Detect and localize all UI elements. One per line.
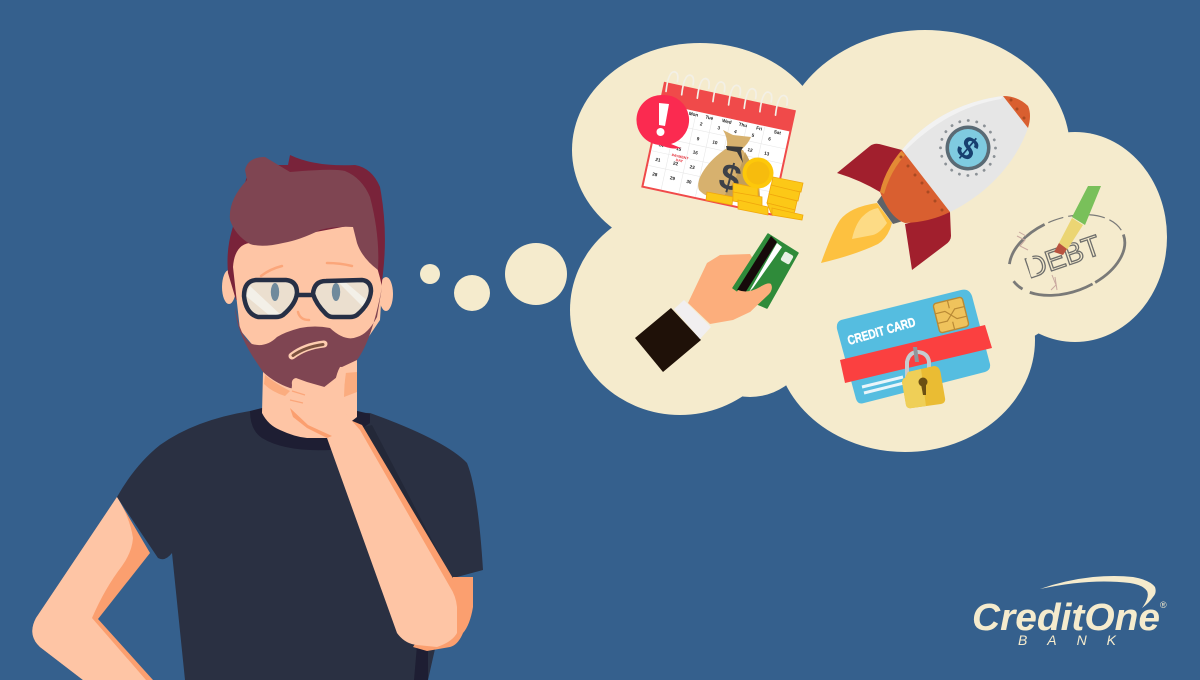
pencil eraser [1054,186,1101,255]
calendar sheet: PAYMENT [671,153,690,161]
beard [235,287,382,390]
flame [821,203,892,263]
logo: Credit One Bank [972,576,1167,648]
stamp word: DEBT [1021,230,1105,285]
calendar sheet: 28 [652,171,658,178]
calendar sheet: DAY [675,158,684,164]
card label: CREDIT CARD [846,314,917,348]
calendar sheet: 10 [712,139,718,145]
icon: hand holding card [635,234,798,372]
calendar sheet: 12 [747,147,754,153]
mouth [292,344,324,356]
green card [733,234,798,308]
calendar sheet: Wed [722,118,732,125]
calendar sheet: Fri [756,125,763,132]
calendar sheet: 6 [768,136,772,142]
calendar sheet: Tue [705,114,714,121]
calendar sheet: 13 [764,151,770,157]
calendar sheet: 29 [669,175,676,181]
hand [688,254,772,324]
logo sub-line: BANK [1018,632,1117,648]
right arm and hand [290,367,473,651]
red band [840,325,992,383]
calendar sheet: Sat [773,129,782,136]
eyebrows [261,263,352,276]
registered mark: ® [1160,600,1167,610]
man figure [32,155,483,680]
calendar sheet: 16 [692,150,699,156]
nose cone [1003,96,1030,128]
thought bubbles [420,243,567,311]
large coin [742,158,774,188]
calendar sheet: 22 [673,161,679,167]
icon: erased debt stamp [998,186,1136,310]
calendar sheet [641,70,799,216]
erased patches [1029,256,1069,277]
calendar sheet: 9 [696,136,700,142]
nose [298,312,309,320]
face [233,225,382,372]
icon: locked credit card [837,290,992,408]
neck [262,360,357,438]
padlock [902,347,945,408]
rocket body [902,96,1028,212]
icon: alert bubble [636,95,689,149]
glasses [244,280,371,317]
calendar sheet: Mon [688,111,699,118]
hair back [228,155,385,300]
porthole [940,120,996,176]
card [837,290,990,404]
ears [222,270,393,311]
hair top [230,157,378,270]
logo wordmark: CreditOne [972,597,1160,639]
fins [837,144,951,270]
calendar sheet: 15 [676,146,682,152]
calendar sheet: 4 [734,129,738,134]
rivets [900,98,1026,212]
calendar sheet: 3 [717,125,721,131]
thought cloud [570,30,1167,452]
calendar sheet: 23 [689,164,696,170]
thumb [725,283,772,312]
calendar sheet: 5 [751,133,755,138]
logo swoosh [1040,576,1156,608]
suit sleeve [635,308,701,372]
eraser crumbs [1017,232,1057,290]
nozzle [877,195,903,224]
left arm [32,497,153,680]
shirt cuff [674,300,711,339]
icon: calendar with money bag [636,70,803,220]
calendar sheet: 30 [686,179,692,185]
money bag [698,130,760,200]
calendar sheet: 14 [658,142,665,148]
calendar sheet: Thu [738,122,748,128]
chip [933,297,969,333]
gold coins [706,158,803,220]
card lines [862,377,904,393]
lower body [880,150,950,223]
porthole: $ [950,128,987,168]
calendar sheet: 21 [655,157,661,163]
icon: rocket [821,96,1030,270]
calendar sheet: 2 [699,121,703,127]
eyes [271,283,340,301]
t-shirt [117,408,483,680]
stamp ring [998,200,1136,310]
money bag: $ [715,155,746,200]
